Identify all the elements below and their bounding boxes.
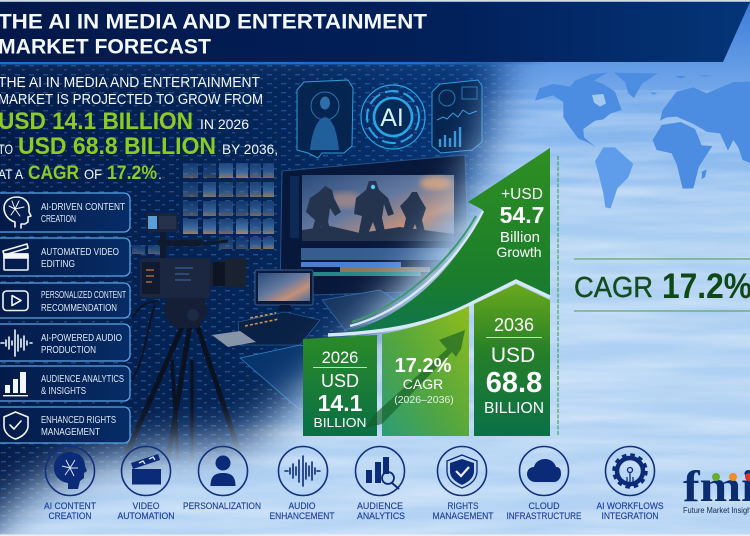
icon: clapperboard solid (131, 454, 161, 484)
feature: audio enhancement (270, 446, 335, 522)
feature: cloud infrastructure (506, 446, 582, 522)
bar: CAGR (365, 306, 469, 436)
feature: audience analytics: AUDIENCE (357, 501, 403, 512)
icon: cloud (527, 459, 561, 482)
HUD ring: AI emblem: AI (380, 104, 404, 132)
hero image: media production studio (0, 60, 560, 536)
title: THE AI IN MEDIA AND ENTERTAINMENT (0, 10, 427, 34)
feature: audio enhancement: ENHANCEMENT (270, 511, 335, 522)
header banner (0, 0, 750, 64)
panel: audience analytics and insights (0, 366, 130, 401)
icon: play button (3, 291, 28, 310)
panel: automated video editing: AUTOMATED VIDEO (41, 247, 119, 258)
panel: AI-driven content creation (0, 193, 130, 232)
growth value: Growth (496, 244, 542, 260)
film camera on tripod (126, 213, 246, 460)
HUD ring: AI emblem (361, 85, 425, 149)
market summary text: THE AI IN MEDIA AND ENTERTAINMENT (0, 74, 260, 91)
world map (535, 73, 750, 208)
feature: rights management (432, 446, 494, 522)
market summary text: OF (84, 166, 102, 182)
panel: AI-powered audio production: PRODUCTION (41, 345, 96, 356)
icon: sound wave (1, 330, 32, 356)
panel: enhanced rights management: ENHANCED RIGHTS (41, 415, 116, 426)
growth value: Billion (500, 229, 540, 246)
panel: automated video editing (0, 238, 130, 276)
bar: CAGR: CAGR (403, 376, 443, 392)
panel: AI-powered audio production (0, 324, 130, 361)
feature: rights management: RIGHTS (448, 501, 478, 512)
HUD panel: digital avatar (297, 80, 353, 158)
feature: video automation: VIDEO (132, 501, 160, 512)
title: MARKET FORECAST (0, 36, 211, 58)
icon: clapperboard (3, 244, 28, 270)
market summary text: 17.2% (107, 163, 157, 184)
growth value (496, 186, 544, 260)
arrow: CAGR growth (365, 330, 465, 428)
control desk (212, 290, 410, 410)
feature: audience analytics: ANALYTICS (357, 511, 405, 522)
feature: cloud infrastructure: INFRASTRUCTURE (506, 511, 582, 522)
market summary text: CAGR (28, 163, 79, 184)
feature: cloud infrastructure: CLOUD (528, 501, 560, 512)
CAGR callout: CAGR (574, 272, 653, 304)
bar: 2026 value: BILLION (314, 415, 366, 430)
bar: CAGR: (2026–2036) (394, 394, 454, 406)
bar: CAGR: 17.2% (395, 355, 452, 377)
bar: 2026 value: 2026 (322, 349, 358, 367)
bar: 2026 value: 14.1 (318, 390, 363, 416)
thumbnail wall (132, 163, 274, 254)
icon: shield check (4, 412, 28, 439)
feature: audience analytics (356, 446, 405, 522)
panel: audience analytics and insights: & INSIGHTS (41, 386, 86, 397)
market summary text: USD 68.8 BILLION (18, 133, 216, 160)
market summary text (0, 74, 278, 184)
market summary text: USD 14.1 BILLION (0, 108, 193, 135)
bar: 2036 value: BILLION (484, 400, 544, 417)
growth value: +USD (501, 186, 543, 203)
feature: personalization (183, 446, 261, 512)
small preview monitor (255, 270, 313, 311)
bar: 2036 value: USD (491, 344, 535, 367)
market summary text: MARKET IS PROJECTED TO GROW FROM (0, 91, 263, 108)
panel: AI-powered audio production: AI-POWERED AUDIO (41, 333, 122, 344)
growth arrow (328, 148, 550, 335)
feature: AI workflows integration: INTEGRATION (602, 511, 659, 522)
bar: 2036 value (474, 284, 550, 436)
icon: gear with circuit (614, 455, 646, 487)
feature: AI workflows integration: AI WORKFLOWS (596, 501, 664, 512)
panel: automated video editing: EDITING (41, 259, 75, 270)
panel: personalized content recommendation (0, 283, 130, 318)
panel: AI-driven content creation: CREATION (41, 214, 76, 225)
icon: shield (447, 455, 477, 488)
panel: personalized content recommendation: RECOMMENDATION (41, 303, 117, 314)
bar: 2036 value: 2036 (494, 315, 534, 335)
feature: rights management: MANAGEMENT (432, 511, 494, 522)
panel: enhanced rights management (0, 407, 130, 443)
feature: AI content creation: CREATION (48, 511, 92, 522)
feature: AI content creation: AI CONTENT (44, 501, 96, 512)
icon: bar chart (3, 372, 28, 396)
feature: personalization: PERSONALIZATION (183, 501, 261, 512)
feature: video automation (118, 446, 175, 522)
growth value: 54.7 (500, 202, 544, 228)
feature: audio enhancement: AUDIO (288, 501, 316, 512)
icon: person (210, 456, 236, 486)
bar: 2026 value (303, 335, 377, 436)
market summary text: IN 2026 (200, 116, 249, 132)
HUD panel: analytics charts (432, 80, 482, 153)
icon: sound wave navy (285, 456, 320, 486)
feature: video automation: AUTOMATION (118, 511, 175, 522)
feature: AI workflows integration (596, 446, 664, 522)
icon: chart and magnifier (366, 457, 399, 489)
CAGR callout (574, 259, 750, 311)
logo: Future Market Insights: fmi (683, 462, 750, 511)
title (0, 14, 427, 54)
market summary text: . (158, 166, 162, 182)
icon: AI head solid (54, 452, 87, 489)
icon: AI head (4, 197, 31, 228)
panel: enhanced rights management: MANAGEMENT (41, 427, 100, 438)
bar: 2026 value: USD (321, 371, 359, 391)
panel: audience analytics and insights: AUDIENCE ANALYTICS (41, 374, 124, 385)
market summary text: BY 2036, (222, 141, 278, 157)
feature: AI content creation (44, 446, 96, 522)
bar: 2036 value: 68.8 (486, 367, 542, 399)
panel: personalized content recommendation: PERSONALIZED CONTENT (41, 290, 126, 301)
panel: AI-driven content creation: AI-DRIVEN CONTENT (41, 202, 125, 213)
main monitor with sci-fi scene (280, 155, 470, 296)
